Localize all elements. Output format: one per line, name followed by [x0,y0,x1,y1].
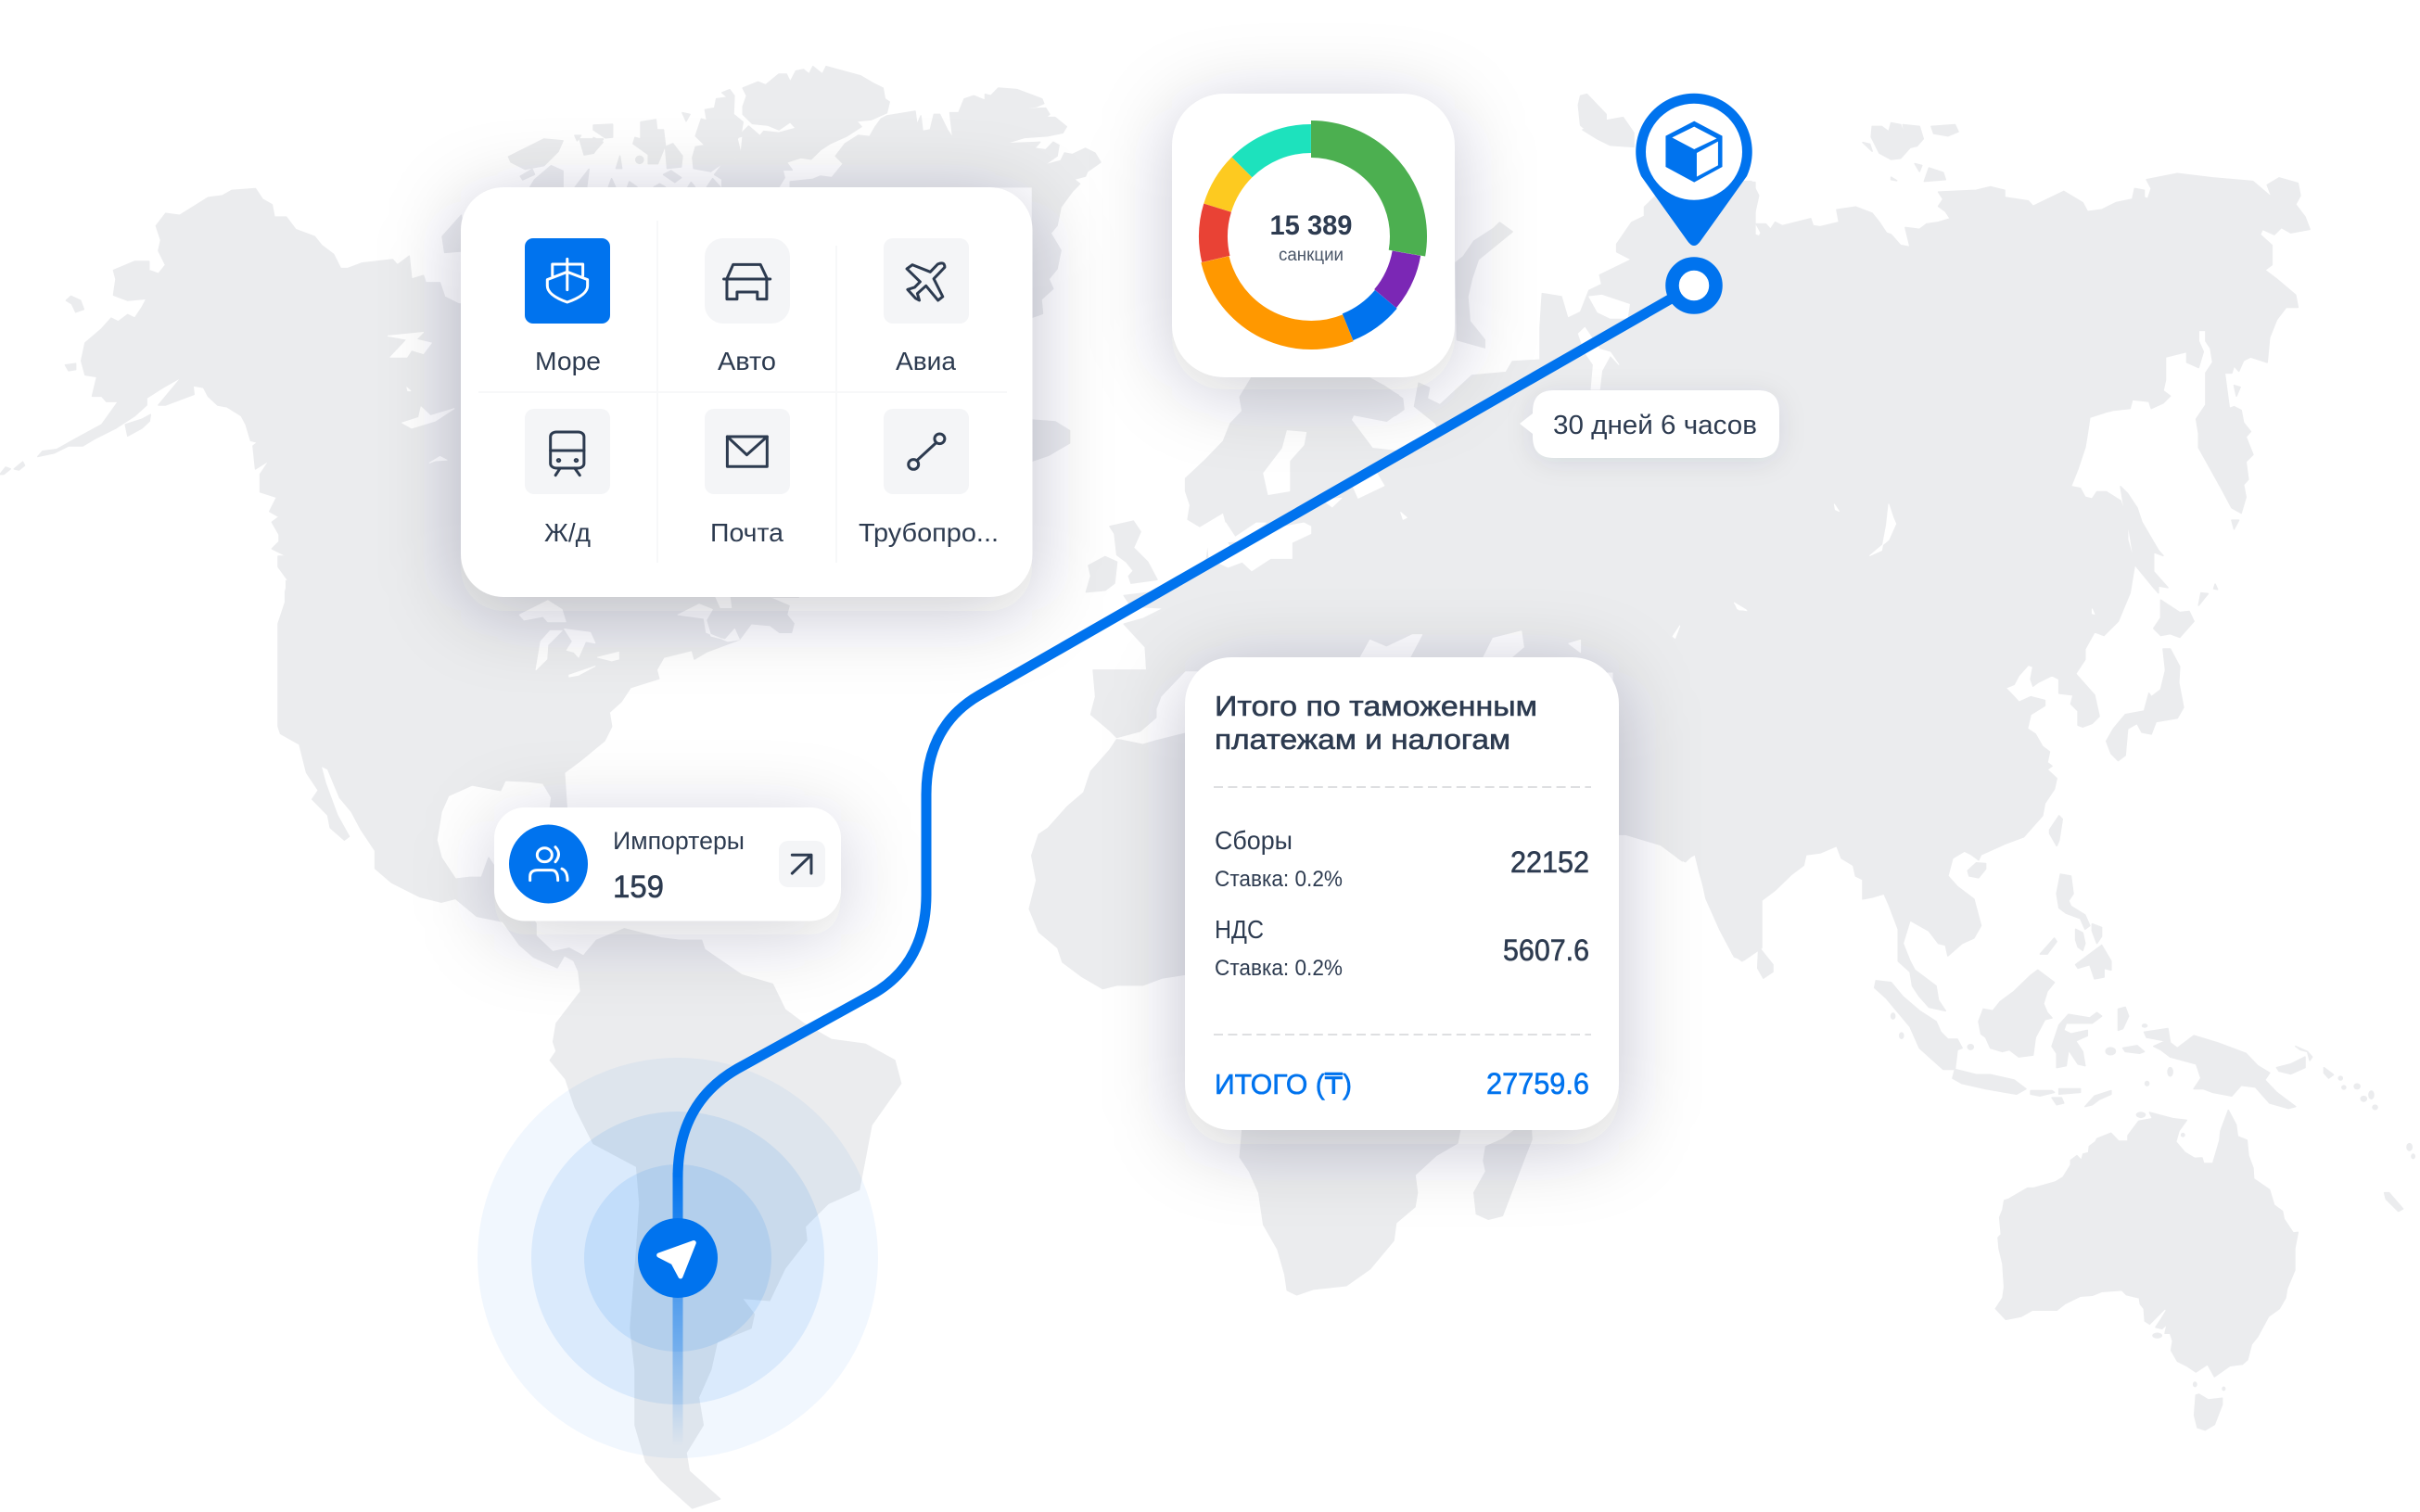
row: grand total: ИТОГО (₸) [1215,1068,1352,1100]
map: Europe, Middle East and central Asia [1033,278,1762,834]
icon: open arrow [779,841,825,887]
label: post: Почта [710,518,783,547]
icon button: road [705,238,790,324]
row: VAT: Ставка: 0.2% [1215,956,1343,981]
map: United States, Mexico and Central America [278,556,798,1053]
transit time label: 30 дней 6 часов [1553,411,1757,440]
row: fees [1215,826,1589,892]
row: fees: Сборы [1215,826,1293,855]
map: northern Russia [1330,95,1827,482]
label: air: Авиа [896,347,956,375]
icon button: post [705,409,790,494]
map: Arctic islands and Greenland [593,67,1101,278]
panel title [1215,690,1537,756]
map: Alaska and western Canada [0,125,613,612]
origin marker [638,1218,718,1298]
icon: users [509,825,588,903]
row: fees: 22152 [1510,845,1589,879]
radar circles around origin [478,1058,878,1458]
route line [678,286,1694,1446]
map: South and Southeast Asia, Japan and New Guinea [1678,649,2377,1117]
panel: customs payments total [1185,657,1619,1144]
map: Australia and Oceania [1995,1111,2414,1430]
map: Siberia and the Russian Far East [1678,123,2310,649]
panel: transport modes [461,187,1033,611]
donut caption: санкции [1279,246,1344,265]
label: rail: Ж/д [544,518,591,547]
row: VAT [1215,915,1589,981]
icon button: air [884,238,969,324]
donut value: 15 389 [1270,210,1352,241]
row: VAT: НДС [1215,915,1264,944]
icon button: pipeline [884,409,969,494]
map: Africa [1029,834,1762,1295]
icon button: rail [525,409,610,494]
importers count: 159 [613,870,664,905]
donut chart [1173,98,1449,375]
importers label: Импортеры [613,827,745,855]
panel title: Итого по таможенным [1215,690,1537,722]
panel title: платежам и налогам [1215,723,1510,756]
map: inland water [388,295,2095,740]
destination ring [1673,263,1715,308]
destination pin with box icon [1636,94,1752,246]
panel: sanctions donut [1172,94,1455,389]
label: road: Авто [718,347,776,375]
row: fees: Ставка: 0.2% [1215,867,1343,892]
row: grand total: 27759.6 [1486,1067,1589,1100]
label: pipeline: Трубопро... [859,518,999,547]
map: South America [550,929,901,1508]
transit time label [1520,390,1779,462]
icon button: sea [525,238,610,324]
row: VAT: 5607.6 [1503,934,1589,967]
label: sea: Море [535,347,601,375]
row: grand total [1215,1067,1589,1100]
panel: importers [494,807,841,934]
